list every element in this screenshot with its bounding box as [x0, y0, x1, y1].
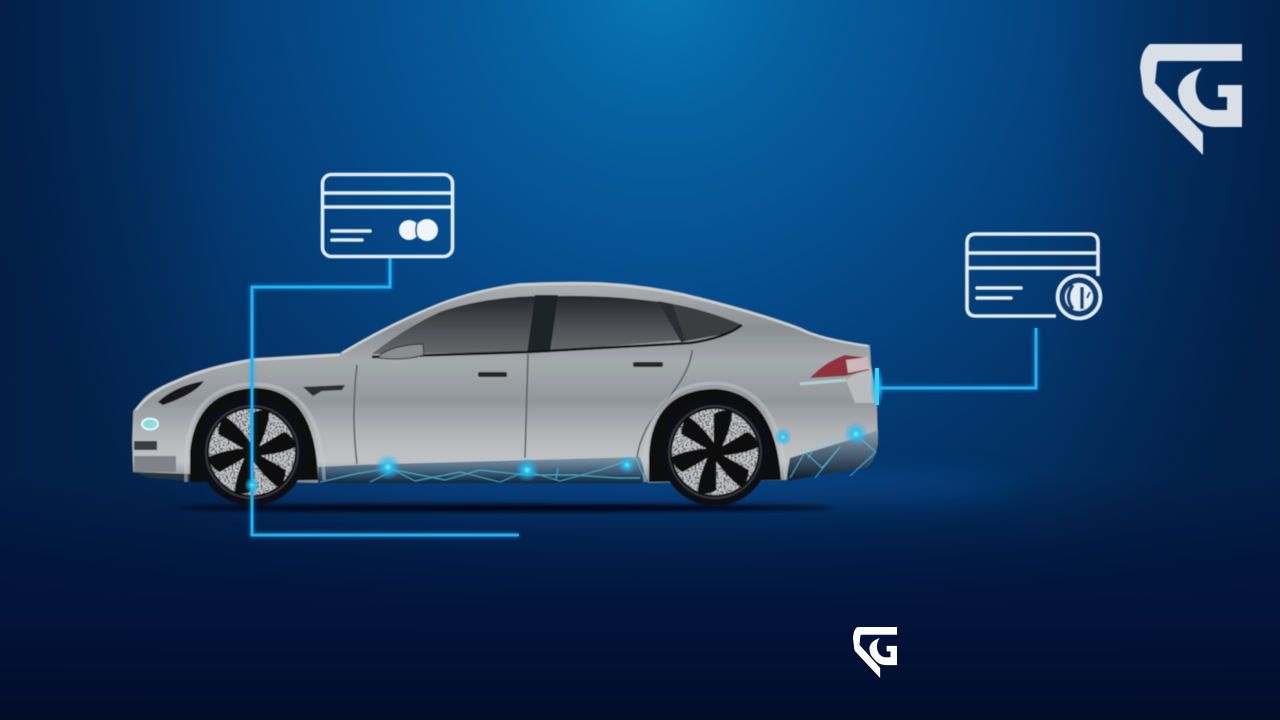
tail light lens [846, 357, 869, 373]
window trim [372, 325, 742, 357]
roof and hood highlight [136, 284, 868, 410]
car body [132, 282, 878, 483]
door handles [478, 362, 663, 377]
connector glow [252, 258, 1036, 535]
icon: payment card with two circles [322, 174, 452, 256]
ground shadow [175, 504, 835, 512]
wing mirror [379, 344, 424, 359]
rear panel highlight [846, 365, 877, 403]
rear lower bumper [786, 430, 878, 481]
front wheel arch [190, 388, 318, 482]
rear light glow [800, 380, 846, 384]
tail light [810, 355, 869, 378]
logo: top right [1140, 44, 1242, 155]
front lower edge [133, 472, 190, 481]
connector node on front wheel [244, 477, 260, 493]
rear wheel [661, 398, 769, 506]
front fender lip [186, 384, 324, 482]
rear wheel arch [649, 389, 781, 482]
front side window [372, 296, 535, 354]
side vent [303, 385, 345, 396]
bumper intake [134, 456, 176, 472]
icon: payment card with coin badge [967, 234, 1100, 318]
window pillar [527, 295, 558, 353]
connector line: first card to car [252, 258, 519, 535]
rear pillar [658, 301, 686, 342]
electric car [132, 282, 878, 506]
lower front bumper [134, 441, 157, 450]
front wheel [198, 398, 306, 506]
headlight slot [158, 381, 204, 405]
circuit lines on sill [320, 434, 876, 482]
glow points [375, 422, 868, 482]
rear side window [550, 296, 682, 351]
headlight lamp [142, 418, 158, 430]
sill [318, 457, 648, 483]
logo: bottom watermark [853, 627, 897, 678]
rear fender lip [645, 383, 786, 482]
quarter window [673, 304, 742, 341]
door gaps [354, 350, 692, 464]
connector node at rear of car [870, 365, 884, 409]
connector line: second card to car [878, 328, 1036, 388]
